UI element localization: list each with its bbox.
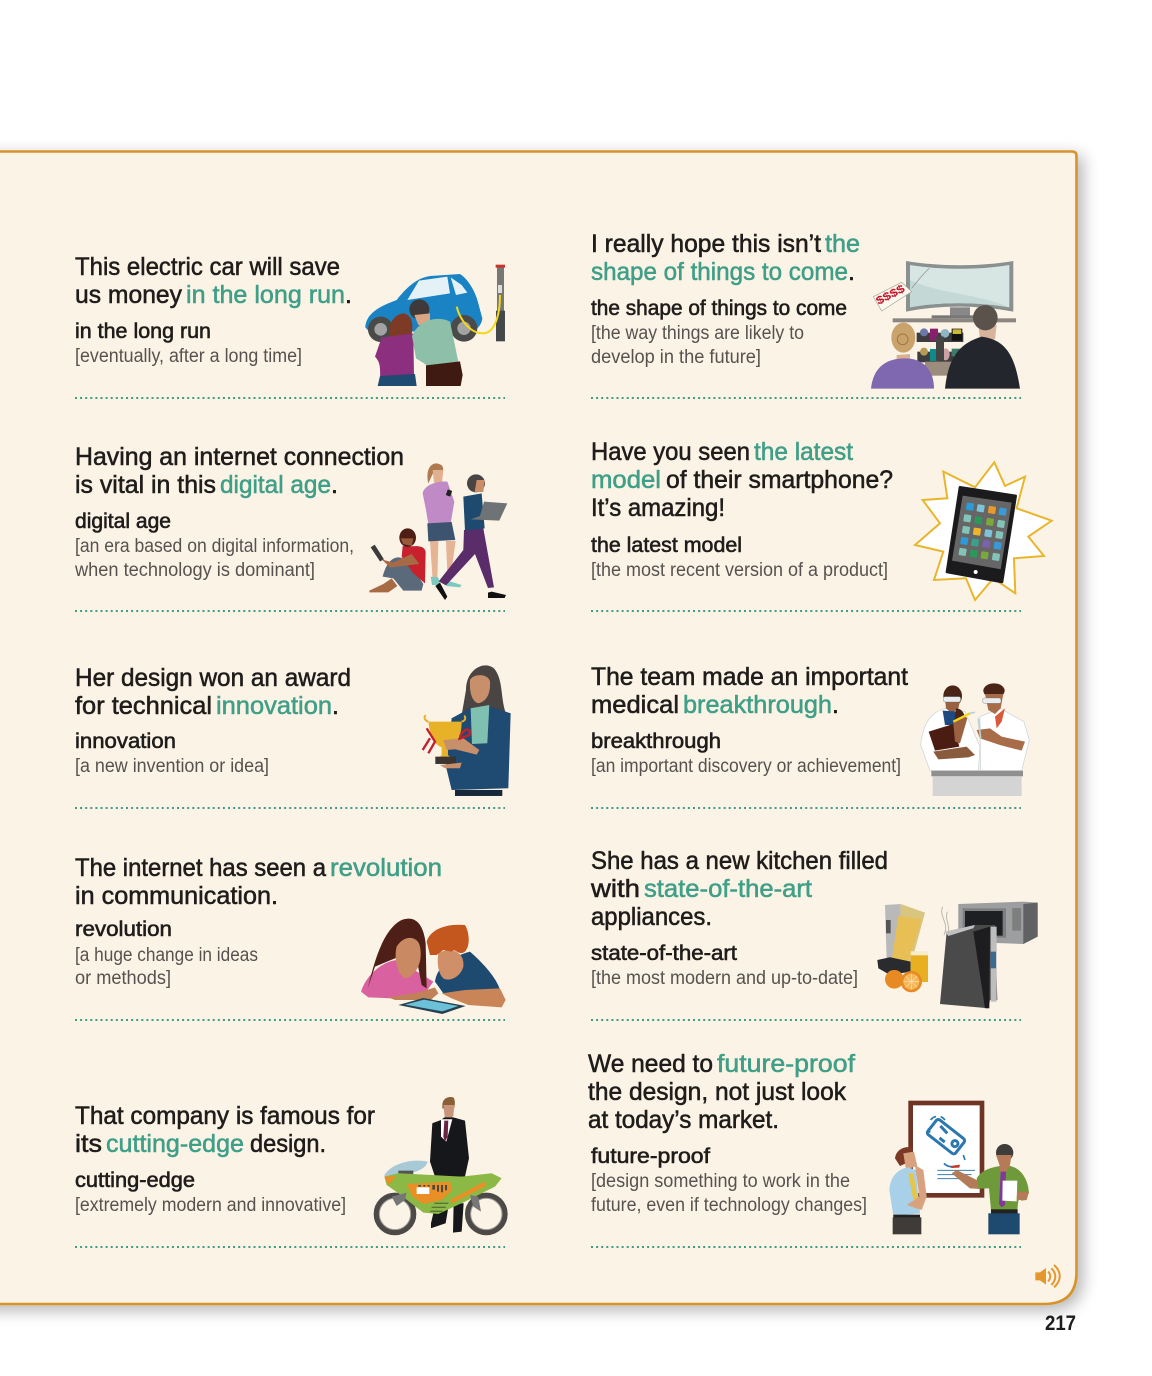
sentence: innovation: [216, 692, 332, 720]
icon: speaker audio: [1035, 1265, 1060, 1287]
sentence: .: [848, 258, 855, 286]
sentence: [591, 663, 908, 719]
sentence: [75, 854, 442, 910]
sentence: the: [825, 230, 860, 258]
phrase card: state-of-the-art: [590, 847, 1038, 1020]
sentence: .: [345, 281, 352, 309]
sentence: She has a new kitchen filled: [591, 847, 888, 875]
sentence: [75, 664, 351, 720]
sentence: for technical: [75, 692, 212, 720]
definition: [an era based on digital information,: [75, 536, 354, 557]
panel: cream page card: [0, 152, 1076, 1304]
divider: [591, 397, 1021, 399]
sentence: appliances.: [591, 903, 712, 931]
sentence: at today’s market.: [588, 1106, 779, 1134]
term: digital age: [75, 510, 171, 533]
definition: [a new invention or idea]: [75, 756, 269, 777]
phrase card: revolution: [75, 854, 506, 1020]
illustration: two men reviewing a phone design: [889, 1103, 1029, 1234]
sentence: the latest: [754, 438, 853, 466]
definition: [extremely modern and innovative]: [75, 1195, 346, 1216]
divider: [591, 807, 1021, 809]
sentence: .: [332, 692, 339, 720]
sentence: design.: [250, 1130, 326, 1158]
sentence: the design, not just look: [588, 1078, 846, 1106]
definition: [a huge change in ideas: [75, 945, 258, 966]
sentence: us money: [75, 281, 182, 309]
divider: [591, 610, 1021, 612]
sentence: of their smartphone?: [666, 466, 893, 494]
sentence: We need to: [588, 1050, 713, 1078]
phrase card: digital age: [74, 443, 507, 611]
definition: [591, 323, 804, 368]
term: the shape of things to come: [591, 297, 847, 320]
phrase card: innovation: [75, 664, 511, 808]
sentence: I really hope this isn’t: [591, 230, 821, 258]
phrase card: the latest model: [591, 438, 1052, 611]
sentence: [75, 443, 404, 499]
sentence: its: [75, 1130, 102, 1158]
sentence: Having an internet connection: [75, 443, 404, 471]
term: breakthrough: [591, 730, 721, 753]
illustration: couple looking at expensive curved TV: [871, 261, 1020, 389]
sentence: [591, 438, 893, 522]
sentence: with: [590, 875, 640, 903]
term: cutting-edge: [75, 1169, 195, 1192]
illustration: two scientists in lab coats: [921, 683, 1029, 796]
illustration: blender, kettle and microwave: [877, 902, 1038, 1008]
definition: [591, 1171, 867, 1216]
sentence: Have you seen: [591, 438, 750, 466]
sentence: The team made an important: [591, 663, 908, 691]
divider: [75, 807, 505, 809]
sentence: digital age: [220, 471, 331, 499]
term: in the long run: [75, 320, 211, 343]
definition: [the most recent version of a product]: [591, 560, 888, 581]
term: revolution: [75, 918, 172, 941]
term: future-proof: [591, 1145, 710, 1168]
definition: when technology is dominant]: [74, 560, 315, 581]
term: state-of-the-art: [591, 942, 737, 965]
sentence: Her design won an award: [75, 664, 351, 692]
phrase card: future-proof: [588, 1050, 1029, 1247]
definition: [the way things are likely to: [591, 323, 804, 344]
sentence: .: [832, 691, 839, 719]
sentence: is vital in this: [75, 471, 216, 499]
divider: [591, 1246, 1021, 1248]
illustration: new tablet in starburst: [915, 462, 1052, 600]
sentence: .: [331, 471, 338, 499]
term: the latest model: [591, 534, 742, 557]
divider: [75, 610, 505, 612]
illustration: businessman with motorbike: [376, 1097, 505, 1233]
phrase card: in the long run: [75, 253, 505, 398]
divider: [75, 397, 505, 399]
term: innovation: [75, 730, 176, 753]
definition: or methods]: [75, 968, 171, 989]
divider: [75, 1246, 505, 1248]
illustration: two children using a tablet: [361, 919, 506, 1014]
phrase card: breakthrough: [591, 663, 1029, 808]
page number: 217: [1045, 1312, 1076, 1335]
sentence: The internet has seen a: [75, 854, 326, 882]
sentence: [75, 1102, 375, 1158]
phrase card: cutting-edge: [75, 1097, 505, 1247]
definition: [74, 536, 354, 581]
definition: [eventually, after a long time]: [75, 346, 302, 367]
sentence: revolution: [330, 854, 442, 882]
sentence: in communication.: [75, 882, 278, 910]
sentence: state-of-the-art: [644, 875, 812, 903]
sentence: medical: [591, 691, 679, 719]
sentence: in the long run: [186, 281, 345, 309]
illustration: couple looking at expensive curved TV: $$$$: [874, 283, 908, 308]
sentence: That company is famous for: [75, 1102, 375, 1130]
sentence: It’s amazing!: [591, 494, 725, 522]
divider: [75, 1019, 505, 1021]
sentence: [75, 253, 352, 309]
definition: future, even if technology changes]: [591, 1195, 867, 1216]
sentence: [590, 847, 888, 931]
illustration: three women with devices: [369, 463, 507, 600]
definition: [75, 945, 258, 989]
sentence: [588, 1050, 855, 1134]
definition: develop in the future]: [591, 347, 761, 368]
definition: [an important discovery or achievement]: [591, 756, 901, 777]
sentence: breakthrough: [683, 691, 832, 719]
illustration: electric car charging: [365, 265, 505, 386]
definition: [the most modern and up-to-date]: [591, 968, 858, 989]
illustration: woman holding trophy: [423, 665, 511, 796]
divider: [591, 1019, 1021, 1021]
sentence: future-proof: [717, 1050, 855, 1078]
phrase card: the shape of things to come: [591, 230, 1021, 398]
sentence: cutting-edge: [106, 1130, 244, 1158]
definition: [design something to work in the: [591, 1171, 850, 1192]
sentence: This electric car will save: [75, 253, 340, 281]
sentence: model: [591, 466, 661, 494]
sentence: shape of things to come: [591, 258, 848, 286]
sentence: [591, 230, 860, 286]
